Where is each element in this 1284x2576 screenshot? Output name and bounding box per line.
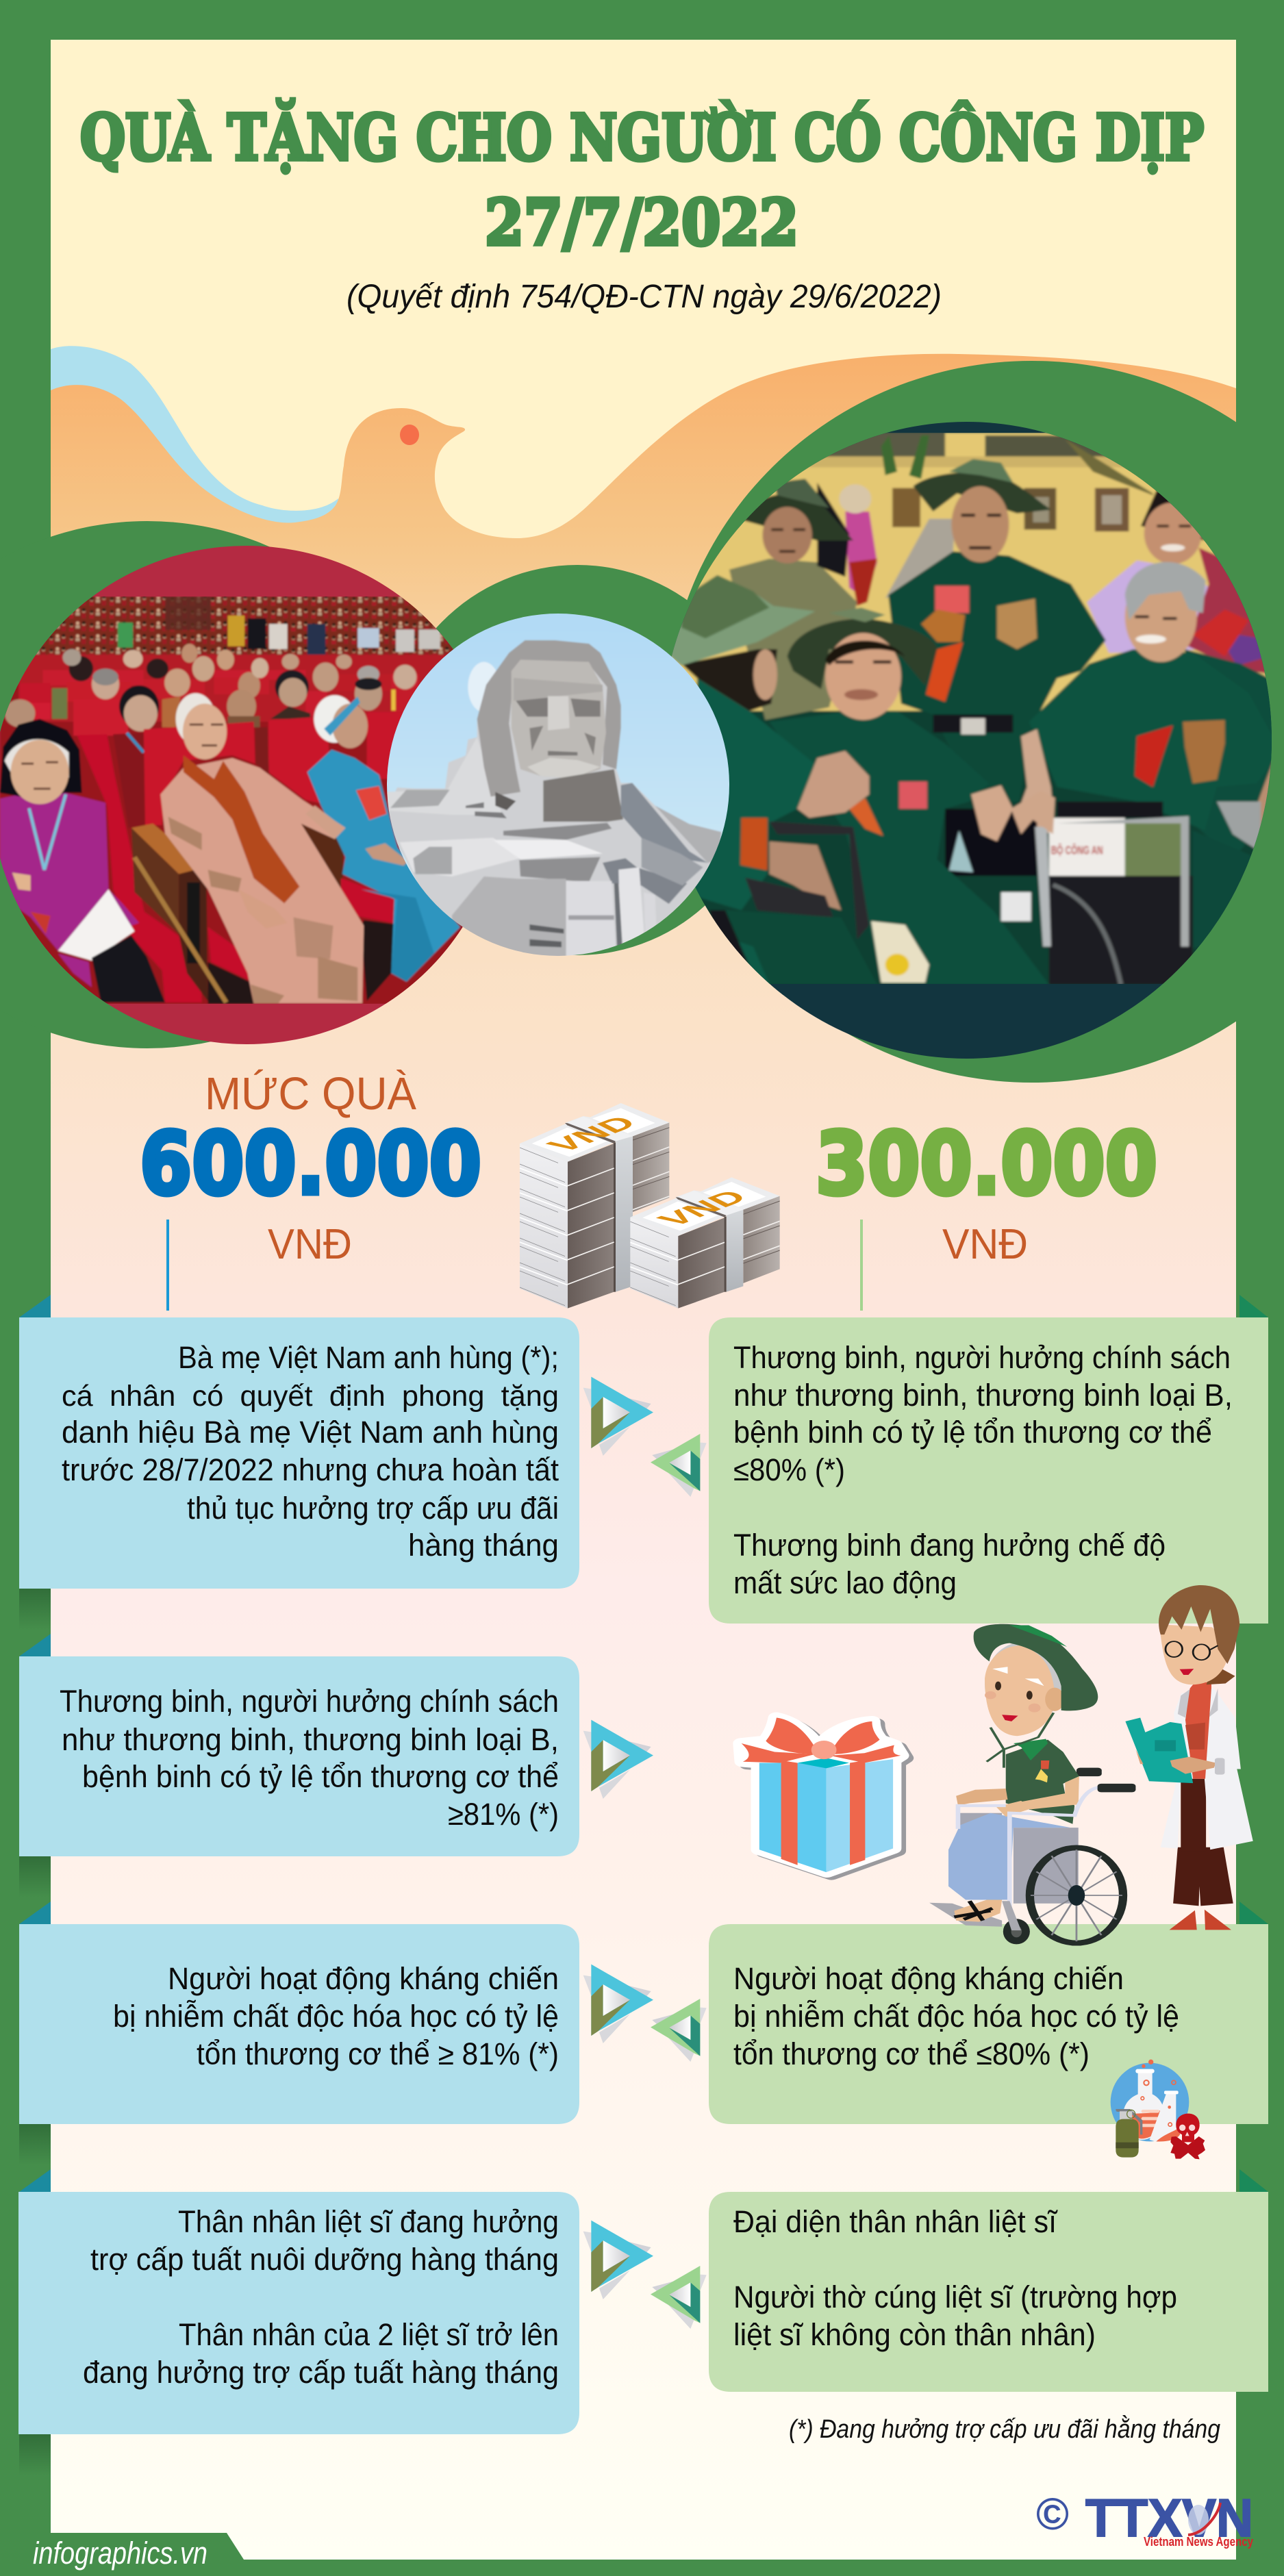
- title: [80, 99, 1204, 260]
- icon: chemical flasks, grenade and skull: [1111, 2060, 1205, 2159]
- panel: 300.000 row 3: Người hoạt động kháng chiến: [733, 1961, 1124, 1996]
- photo: heroic mothers seated in a hall: [0, 546, 463, 1044]
- panel: 300.000 row 1: Thương binh đang hưởng chế độ: [733, 1528, 1166, 1563]
- heading: gift level: MỨC QUÀ: [205, 1068, 416, 1120]
- panel: 600.000 row 1: trước 28/7/2022 nhưng chưa hoàn tất: [62, 1452, 559, 1487]
- subtitle: (Quyết định 754/QĐ-CTN ngày 29/6/2022): [347, 279, 942, 315]
- panel: 600.000 row 1: thủ tục hưởng trợ cấp ưu đãi: [187, 1491, 559, 1526]
- panel: 300.000 row 1: Thương binh, người hưởng chính sách: [733, 1340, 1231, 1375]
- connector line green: [860, 1220, 863, 1311]
- icon: stacks of VND banknotes: VND: [650, 1186, 755, 1230]
- title: 27/7/2022: [485, 186, 798, 260]
- panel: 600.000 row 3: bị nhiễm chất độc hóa học có tỷ lệ: [113, 1999, 559, 2034]
- panel: 600.000 row 3: tổn thương cơ thể ≥ 81% (*): [197, 2036, 559, 2071]
- arrow: row 1 left: [651, 1434, 707, 1497]
- frame side mask: [1236, 0, 1284, 2576]
- panel: 600.000 row 2: [19, 1634, 579, 1897]
- unit VNĐ right: VNĐ: [942, 1221, 1028, 1268]
- panel: 300.000 row 1: ≤80% (*): [733, 1452, 845, 1487]
- photo: veterans with wheelchairs: BỘ CÔNG AN: [1051, 843, 1103, 857]
- panel: 600.000 row 1: Bà mẹ Việt Nam anh hùng (*);: [178, 1340, 559, 1375]
- footnote: (*) Đang hưởng trợ cấp ưu đãi hằng tháng: [789, 2414, 1220, 2444]
- peach dove wave and page gradient: [51, 354, 1236, 2560]
- illustration: gift, veteran in wheelchair and doctor: [742, 1585, 1253, 1944]
- logo: TTXVN Vietnam News Agency: ©: [1036, 2488, 1069, 2539]
- connector line blue: [166, 1220, 169, 1311]
- photo: statue of Vietnamese heroic mother: [379, 605, 738, 963]
- arrow: row 4 right: [583, 2221, 653, 2299]
- right large green blob: [666, 361, 1284, 1083]
- photo: veterans with wheelchairs: [657, 418, 1284, 1061]
- arrow: row 1 right: [583, 1377, 653, 1456]
- panel: 300.000 row 1: như thương binh, thương binh loại B,: [733, 1378, 1233, 1413]
- icon: veteran in wheelchair: [929, 1624, 1135, 1944]
- panel: 300.000 row 4: [709, 2169, 1268, 2392]
- panel: 600.000 row 1: [19, 1295, 579, 1630]
- panel: 600.000 row 3: Người hoạt động kháng chiến: [168, 1961, 559, 1996]
- arrow: row 4 left: [651, 2266, 707, 2329]
- panel: 600.000 row 4: Thân nhân của 2 liệt sĩ trở lên: [179, 2317, 559, 2352]
- unit VNĐ left: VNĐ: [268, 1221, 352, 1268]
- middle green blob: [386, 565, 769, 955]
- panel: 300.000 row 1: [709, 1295, 1268, 1624]
- panel: 300.000 row 3: tổn thương cơ thể ≤80% (*): [733, 2036, 1090, 2071]
- panel: 600.000 row 2: ≥81% (*): [448, 1797, 559, 1832]
- icon: stacks of VND banknotes: [520, 1103, 780, 1309]
- panel: 300.000 row 1: mất sức lao động: [733, 1565, 957, 1600]
- logo: TTXVN Vietnam News Agency: Vietnam News Agency: [1144, 2535, 1253, 2549]
- panel: 600.000 row 2: như thương binh, thương binh loại B,: [62, 1722, 559, 1757]
- left green blob: [0, 521, 431, 1048]
- decorative blue swoosh: [51, 346, 338, 548]
- panel: 300.000 row 4: liệt sĩ không còn thân nhân): [733, 2317, 1096, 2352]
- icon: gift box: [742, 1717, 905, 1875]
- footer tab: [51, 2533, 244, 2560]
- panel: 300.000 row 3: bị nhiễm chất độc hóa học có tỷ lệ: [733, 1999, 1179, 2034]
- panel: 600.000 row 1: hàng tháng: [408, 1528, 559, 1563]
- icon: dove eye: [400, 425, 419, 445]
- panel: 600.000 row 2: Thương binh, người hưởng chính sách: [60, 1684, 559, 1719]
- panel: 600.000 row 2: bệnh binh có tỷ lệ tổn thương cơ thể: [82, 1759, 559, 1794]
- panel: 300.000 row 1: bệnh binh có tỷ lệ tổn thương cơ thể: [733, 1415, 1212, 1450]
- panel: 600.000 row 4: Thân nhân liệt sĩ đang hưởng: [178, 2204, 559, 2239]
- arrow: row 3 left: [651, 1999, 707, 2062]
- arrow: row 2 right: [583, 1720, 653, 1799]
- panel: 600.000 row 1: danh hiệu Bà mẹ Việt Nam anh hùng: [62, 1415, 559, 1450]
- amount 600.000: 600.000: [140, 1113, 481, 1214]
- amount 300.000: 300.000: [816, 1113, 1157, 1214]
- icon: doctor holding a book: [1125, 1585, 1253, 1930]
- arrow: row 3 right: [583, 1965, 653, 2043]
- panel: 600.000 row 3: [19, 1902, 579, 2165]
- panel: 300.000 row 4: Người thờ cúng liệt sĩ (trường hợp: [733, 2280, 1177, 2314]
- panel: 300.000 row 3: [709, 1902, 1268, 2124]
- icon: stacks of VND banknotes: VND: [540, 1112, 644, 1156]
- panel: 600.000 row 4: [18, 2169, 579, 2475]
- panel: 600.000 row 4: đang hưởng trợ cấp tuất hàng tháng: [83, 2355, 559, 2390]
- panel: 600.000 row 1: cá nhân có quyết định phong tặng: [62, 1380, 559, 1413]
- logo: TTXVN Vietnam News Agency: TTXVN: [1085, 2488, 1253, 2548]
- footer site name: infographics.vn: [33, 2536, 207, 2571]
- panel: 600.000 row 4: trợ cấp tuất nuôi dưỡng hàng tháng: [90, 2242, 559, 2277]
- panel: 300.000 row 4: Đại diện thân nhân liệt sĩ: [733, 2204, 1058, 2239]
